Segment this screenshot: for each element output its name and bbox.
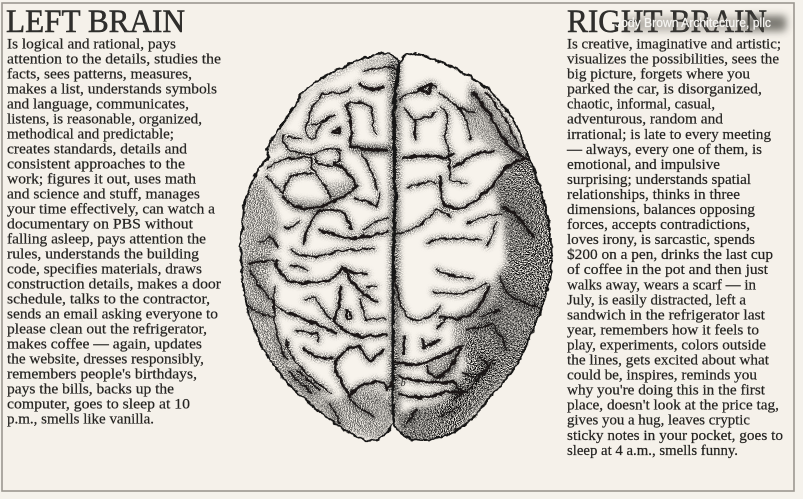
panel: left brain xyxy=(6,4,221,428)
watermark: Jody Brown Architecture, pllc: Jody Brown Architecture, pllc xyxy=(615,15,771,30)
text block: right brain traits: visualizes the possibilities, sees the xyxy=(567,52,779,68)
text block: right brain traits: dimensions, balances opposing xyxy=(567,202,755,218)
brain outline xyxy=(241,53,552,441)
text block: right brain traits: year, remembers how it feels to xyxy=(567,322,759,338)
text block: left brain traits: your time effectively, can watch a xyxy=(7,202,215,218)
text block: right brain traits: could be, inspires, reminds you xyxy=(567,368,757,384)
text block: left brain traits: Is logical and rational, pays xyxy=(7,36,176,52)
text block: right brain traits: loves irony, is sarcastic, spends xyxy=(567,232,755,248)
text block: left brain traits: rules, understands the building xyxy=(7,246,200,262)
text block: right brain traits: big picture, forgets where you xyxy=(567,67,751,83)
text block: left brain traits: listens, is reasonable, organized, xyxy=(7,112,202,128)
heading: left brain: LEFT BRAIN xyxy=(6,4,185,40)
text block: left brain traits: please clean out the refrigerator, xyxy=(7,322,207,338)
text block: right brain traits: place, doesn't look at the price tag, xyxy=(567,398,779,414)
engraved letter labels: a xyxy=(471,90,475,99)
text block: left brain traits: schedule, talks to the contractor, xyxy=(7,292,210,308)
heading: right brain: RIGHT BRAIN xyxy=(567,4,767,40)
text block: left brain traits: construction details, makes a door xyxy=(7,276,221,292)
engraved letter labels xyxy=(385,90,518,400)
text block: right brain traits: sticky notes in your pocket, goes to xyxy=(567,428,783,444)
text block: right brain traits: sandwich in the refrigerator last xyxy=(567,307,766,323)
engraved letter labels: p xyxy=(385,389,391,400)
text block: right brain traits: $200 on a pen, drinks the last cup xyxy=(567,247,773,263)
text block: right brain traits: why you're doing this in the first xyxy=(567,383,766,399)
left hemisphere sulci xyxy=(260,68,397,247)
engraved letter labels: B xyxy=(513,216,518,225)
text block: left brain traits: falling asleep, pays attention the xyxy=(7,232,206,248)
text block: right brain traits: sleep at 4 a.m., smells funny. xyxy=(567,443,738,459)
text block: right brain traits: irrational; is late to every meeting xyxy=(567,127,771,143)
text block: right brain traits: walks away, wears a scarf — in xyxy=(567,277,756,293)
text block: right brain traits xyxy=(566,36,783,459)
engraved letter labels: b xyxy=(401,378,406,389)
text block: right brain traits: adventurous, random and xyxy=(567,112,724,128)
text block: left brain traits: methodical and predictable; xyxy=(7,126,174,142)
text block: left brain traits: pays the bills, backs up the xyxy=(7,382,174,398)
text block: left brain traits: facts, sees patterns, measures, xyxy=(7,66,192,82)
text block: left brain traits: work; figures it out, uses math xyxy=(7,172,197,188)
illustration: engraved brain xyxy=(240,52,560,443)
text block: right brain traits: relationships, thinks in three xyxy=(567,187,740,203)
text block: left brain traits: and science and stuff, manages xyxy=(7,186,200,202)
central fissure xyxy=(392,64,399,422)
sulcus halo shading xyxy=(243,68,540,423)
stippled shading xyxy=(240,52,560,443)
text block: left brain traits: code, specifies materials, draws xyxy=(7,262,202,278)
text block: left brain traits: attention to the details, studies the xyxy=(7,52,221,68)
text block: right brain traits: gives you a hug, leaves cryptic xyxy=(567,413,750,429)
text block: right brain traits: emotional, and impulsive xyxy=(567,157,720,173)
text block: right brain traits: parked the car, is disorganized, xyxy=(567,82,762,98)
text block: left brain traits: makes a list, understands symbols xyxy=(7,82,217,98)
text block: right brain traits: play, experiments, colors outside xyxy=(567,338,766,354)
text block: left brain traits: makes coffee — again, updates xyxy=(7,336,202,352)
text block: right brain traits: July, is easily distracted, left a xyxy=(567,292,746,308)
text block: left brain traits: and language, communicates, xyxy=(7,96,189,112)
text block: left brain traits xyxy=(7,36,221,428)
sulci xyxy=(243,68,540,423)
panel: right brain xyxy=(566,4,783,459)
text block: left brain traits: consistent approaches to the xyxy=(7,156,185,172)
text block: left brain traits: creates standards, details and xyxy=(7,142,188,158)
text block: right brain traits: of coffee in the pot and then just xyxy=(567,262,769,278)
text block: right brain traits: Is creative, imaginative and artistic; xyxy=(567,36,781,52)
text block: left brain traits: sends an email asking everyone to xyxy=(7,306,218,322)
text block: right brain traits: chaotic, informal, casual, xyxy=(567,97,715,113)
right hemisphere sulci xyxy=(397,84,533,247)
text block: left brain traits: computer, goes to sleep at 10 xyxy=(7,396,190,412)
text block: right brain traits: surprising; understands spatial xyxy=(567,172,751,188)
text block: right brain traits: forces, accepts contradictions, xyxy=(567,217,750,233)
text block: left brain traits: remembers people's birthdays, xyxy=(7,366,197,382)
text block: right brain traits: the lines, gets excited about what xyxy=(567,352,770,368)
text block: left brain traits: documentary on PBS without xyxy=(7,216,194,232)
text block: right brain traits: — always, every one of them, is xyxy=(566,142,762,158)
text block: left brain traits: the website, dresses responsibly, xyxy=(7,352,204,368)
lower sulci xyxy=(243,248,540,423)
text block: left brain traits: p.m., smells like vanilla. xyxy=(7,412,154,428)
